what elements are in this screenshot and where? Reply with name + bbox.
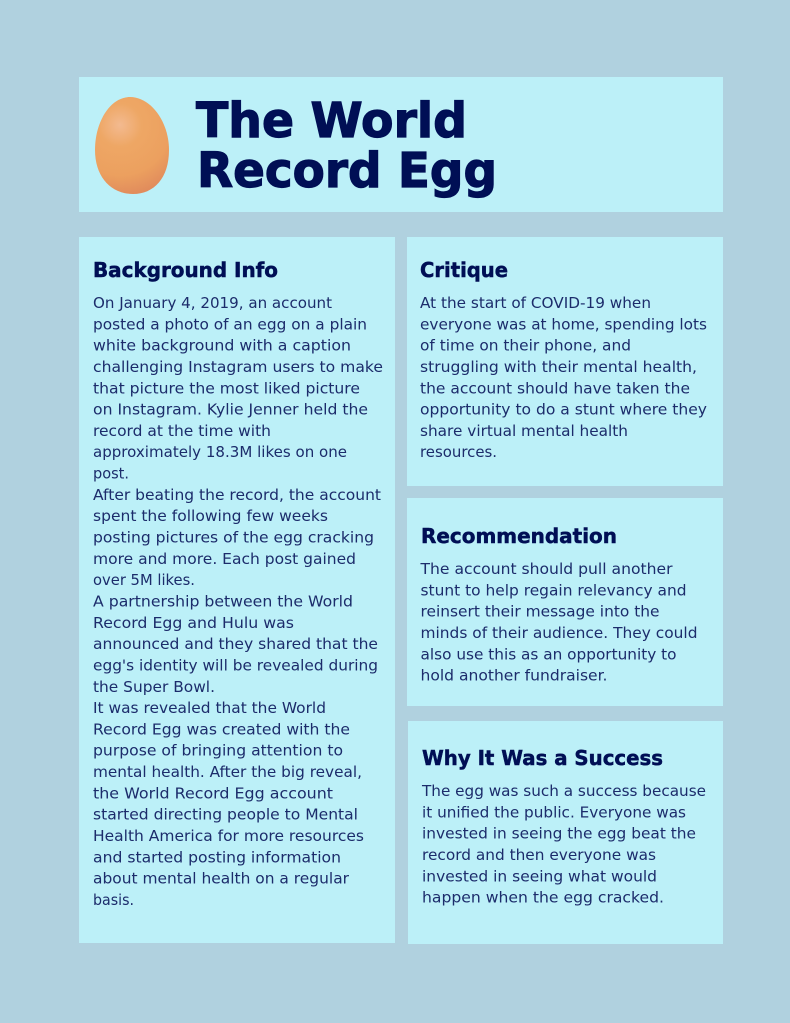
text block: recommendation: The account should pull another xyxy=(419,560,673,578)
text block: background info: posting pictures of the egg cracking xyxy=(93,528,374,546)
text block: background info: Record Egg was created with the xyxy=(93,720,350,738)
heading: critique: Critique xyxy=(420,258,508,282)
panel: critique xyxy=(407,237,723,486)
text block: recommendation: reinsert their message into the xyxy=(420,603,660,621)
text block: why it was a success: happen when the egg cracked. xyxy=(422,889,664,907)
icon: egg xyxy=(95,97,169,194)
text block: background info: basis. xyxy=(93,891,134,909)
text block: background info: posted a photo of an egg on a plain xyxy=(93,315,367,333)
text block: why it was a success: record and then everyone was xyxy=(422,846,656,864)
text block: why it was a success xyxy=(421,782,706,907)
text block: background info: post. xyxy=(93,465,129,483)
text block: background info: It was revealed that the World xyxy=(93,699,326,717)
text block: background info: white background with a caption xyxy=(93,337,351,355)
text block: background info: mental health. After the big reveal, xyxy=(93,763,362,781)
panel: title header xyxy=(79,77,723,212)
text block: critique: resources. xyxy=(420,443,497,461)
text block: background info: record at the time with xyxy=(93,422,271,440)
text block: background info: about mental health on a regular xyxy=(93,870,350,888)
text block: background info: purpose of bringing attention to xyxy=(93,742,343,760)
text block: critique: of time on their phone, and xyxy=(420,337,631,355)
text block: background info: After beating the record, the account xyxy=(93,486,381,504)
text block: background info: egg's identity will be revealed during xyxy=(93,656,378,674)
heading: why it was a success: Why It Was a Success xyxy=(422,746,663,770)
text block: background info xyxy=(93,294,383,909)
text block: recommendation: minds of their audience. They could xyxy=(420,624,698,642)
text block: why it was a success: invested in seeing the egg beat the xyxy=(422,825,696,843)
title: Record Egg xyxy=(197,143,497,199)
text block: critique: opportunity to do a stunt where they xyxy=(420,401,707,419)
panel: background info xyxy=(79,237,395,943)
panel: recommendation xyxy=(407,498,723,706)
text block: background info: spent the following few weeks xyxy=(93,507,328,525)
text block: recommendation xyxy=(419,560,698,685)
text block: background info: the Super Bowl. xyxy=(93,678,215,696)
text block: recommendation: also use this as an opportunity to xyxy=(420,645,676,663)
text block: critique: everyone was at home, spending lots xyxy=(420,315,707,333)
text block: critique: share virtual mental health xyxy=(420,422,628,440)
panel: why it was a success xyxy=(408,721,723,944)
title: The World xyxy=(196,93,467,149)
text block: background info: Health America for more resources xyxy=(93,827,364,845)
text block: why it was a success: invested in seeing what would xyxy=(422,867,657,885)
text block: recommendation: stunt to help regain relevancy and xyxy=(420,581,686,599)
text block: background info: and started posting information xyxy=(93,848,341,866)
text block: background info: approximately 18.3M likes on one xyxy=(93,443,347,461)
text block: critique: struggling with their mental health, xyxy=(420,358,697,376)
text block: recommendation: hold another fundraiser. xyxy=(420,667,608,685)
text block: critique xyxy=(420,294,707,461)
heading: background info: Background Info xyxy=(93,258,278,282)
title xyxy=(196,93,497,199)
text block: background info: the World Record Egg account xyxy=(93,784,333,802)
text block: critique: the account should have taken the xyxy=(420,379,690,397)
text block: background info: started directing people to Mental xyxy=(93,806,358,824)
text block: background info: challenging Instagram users to make xyxy=(93,358,383,376)
text block: background info: more and more. Each post gained xyxy=(93,550,356,568)
text block: background info: Record Egg and Hulu was xyxy=(93,614,294,632)
text block: why it was a success: it unified the public. Everyone was xyxy=(422,803,686,821)
text block: critique: At the start of COVID-19 when xyxy=(420,294,651,312)
text block: background info: that picture the most liked picture xyxy=(93,379,360,397)
text block: background info: A partnership between the World xyxy=(93,592,353,610)
text block: background info: on Instagram. Kylie Jenner held the xyxy=(93,401,368,419)
text block: background info: On January 4, 2019, an account xyxy=(93,294,332,312)
text block: why it was a success: The egg was such a success because xyxy=(421,782,706,800)
text block: background info: announced and they shared that the xyxy=(93,635,378,653)
heading: recommendation: Recommendation xyxy=(421,524,617,548)
text block: background info: over 5M likes. xyxy=(93,571,195,589)
